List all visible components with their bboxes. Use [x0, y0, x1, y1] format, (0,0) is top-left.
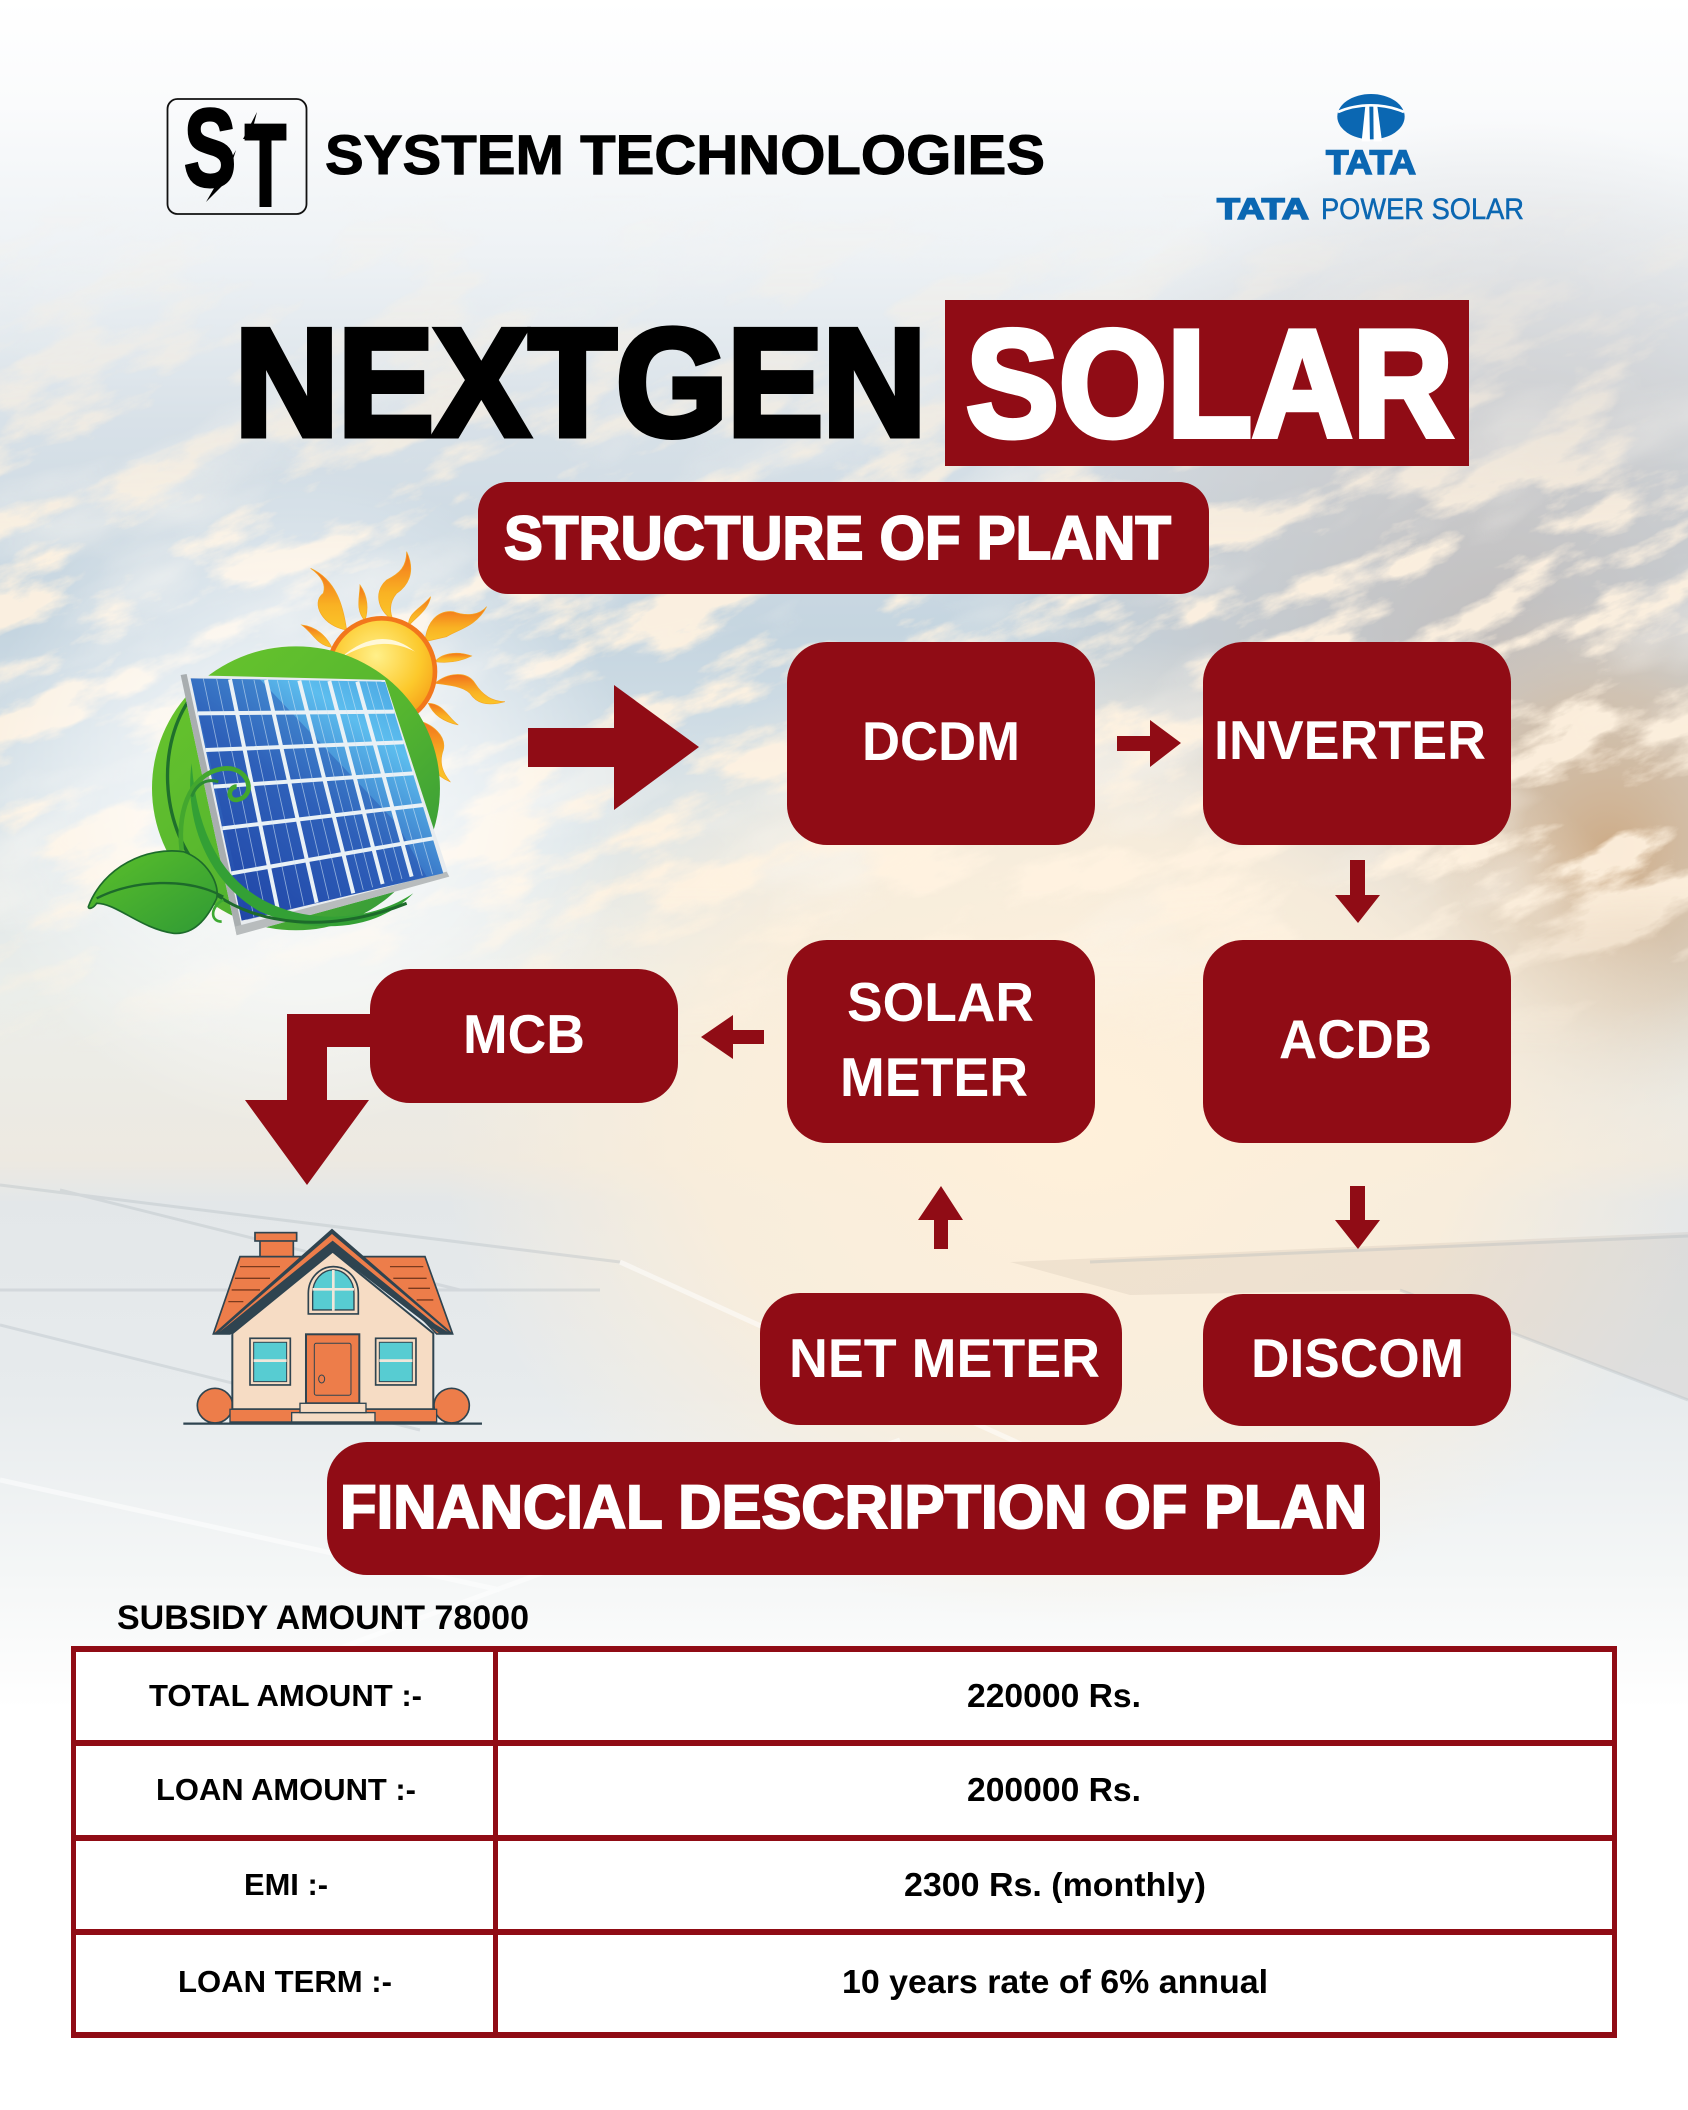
Tata Power Solar wordmark: TATA [1217, 193, 1309, 226]
icon: sun rays [302, 552, 505, 782]
icon: house wall [232, 1252, 433, 1409]
label line: meter: METER [840, 1046, 1028, 1108]
icon: chimney [255, 1233, 297, 1258]
company name: SYSTEM TECHNOLOGIES [325, 123, 1045, 186]
box: inverter: INVERTER [1214, 709, 1486, 771]
icon: side roofs [213, 1257, 453, 1334]
Tata wordmark: TATA [1326, 144, 1416, 182]
box: DCDM [787, 642, 1095, 845]
subsidy amount text: SUBSIDY AMOUNT 78000 [117, 1599, 529, 1637]
logo letter T: T [245, 102, 286, 230]
icon: left window [250, 1338, 290, 1385]
box: discom [1203, 1294, 1511, 1426]
title: NEXTGEN SOLAR: NEXTGEN [235, 298, 926, 468]
arrow: net meter to solar meter [918, 1186, 963, 1249]
arrow: solar meter to MCB [701, 1015, 764, 1059]
title highlight box [945, 300, 1469, 466]
row: loan amount: 200000 Rs. [967, 1771, 1141, 1808]
box: inverter [1203, 642, 1511, 845]
background: sky and solar field photo [0, 130, 1688, 1612]
box: net meter [760, 1293, 1122, 1425]
title: NEXTGEN SOLAR [235, 298, 1469, 469]
row: total amount [149, 1677, 1141, 1714]
row: total amount: 220000 Rs. [967, 1677, 1141, 1714]
icon: solar panel [181, 674, 449, 935]
logo: ST mark [168, 87, 306, 230]
box: discom: DISCOM [1251, 1327, 1464, 1389]
icon: vine ribbon and curl [181, 763, 413, 926]
row: EMI: 2300 Rs. (monthly) [904, 1866, 1206, 1903]
icon: sun disc [328, 618, 435, 725]
arrow: ACDB to discom [1335, 1186, 1380, 1249]
row: loan amount [156, 1771, 1141, 1808]
arrow: MCB to house [245, 1014, 371, 1185]
title word SOLAR: SOLAR [966, 299, 1453, 469]
row: EMI [244, 1866, 1206, 1903]
row: loan term [178, 1963, 1268, 2000]
logo: Tata Power Solar [1217, 94, 1524, 226]
power solar wordmark: POWER SOLAR [1321, 193, 1524, 226]
box: ACDB: ACDB [1279, 1008, 1432, 1070]
box: solar meter [787, 940, 1095, 1143]
box: ACDB [1203, 940, 1511, 1143]
row: total amount: TOTAL AMOUNT :- [149, 1678, 422, 1713]
row: loan amount: LOAN AMOUNT :- [156, 1772, 416, 1807]
box: DCDM: DCDM [862, 710, 1020, 772]
heading: financial description of plan: FINANCIAL DESCRIPTION OF PLAN [340, 1473, 1367, 1541]
heading: structure of plant [478, 482, 1209, 594]
box: net meter: NET METER [789, 1327, 1100, 1389]
heading: financial description of plan [327, 1442, 1380, 1575]
box: MCB: MCB [463, 1003, 585, 1065]
arrow: inverter to ACDB [1335, 860, 1380, 923]
heading: structure of plant: STRUCTURE OF PLANT [504, 504, 1171, 572]
illustration: house [183, 1229, 482, 1424]
icon: leaf [88, 851, 217, 933]
row: loan term: 10 years rate of 6% annual [842, 1963, 1268, 2000]
icon: gable roof [213, 1229, 453, 1334]
icon: bushes [197, 1388, 469, 1423]
box: solar meter: SOLAR [847, 971, 1034, 1033]
icon: inner vine [168, 697, 200, 870]
icon: arched window [308, 1267, 358, 1314]
row: loan term: LOAN TERM :- [178, 1964, 392, 1999]
logo letter S: S [184, 87, 236, 210]
icon: Tata emblem [1337, 94, 1405, 141]
table: financial plan [71, 1646, 1617, 2038]
row: EMI: EMI :- [244, 1867, 328, 1902]
arrow: DCDM to inverter [1117, 720, 1181, 767]
icon: green circle [152, 646, 440, 930]
icon: base and steps [230, 1403, 437, 1422]
icon: right window [376, 1338, 416, 1385]
arrow: panel to DCDM [528, 685, 699, 810]
box: MCB [370, 969, 678, 1103]
illustration: solar panel with sun and leaf [88, 552, 505, 935]
icon: door [306, 1334, 359, 1403]
